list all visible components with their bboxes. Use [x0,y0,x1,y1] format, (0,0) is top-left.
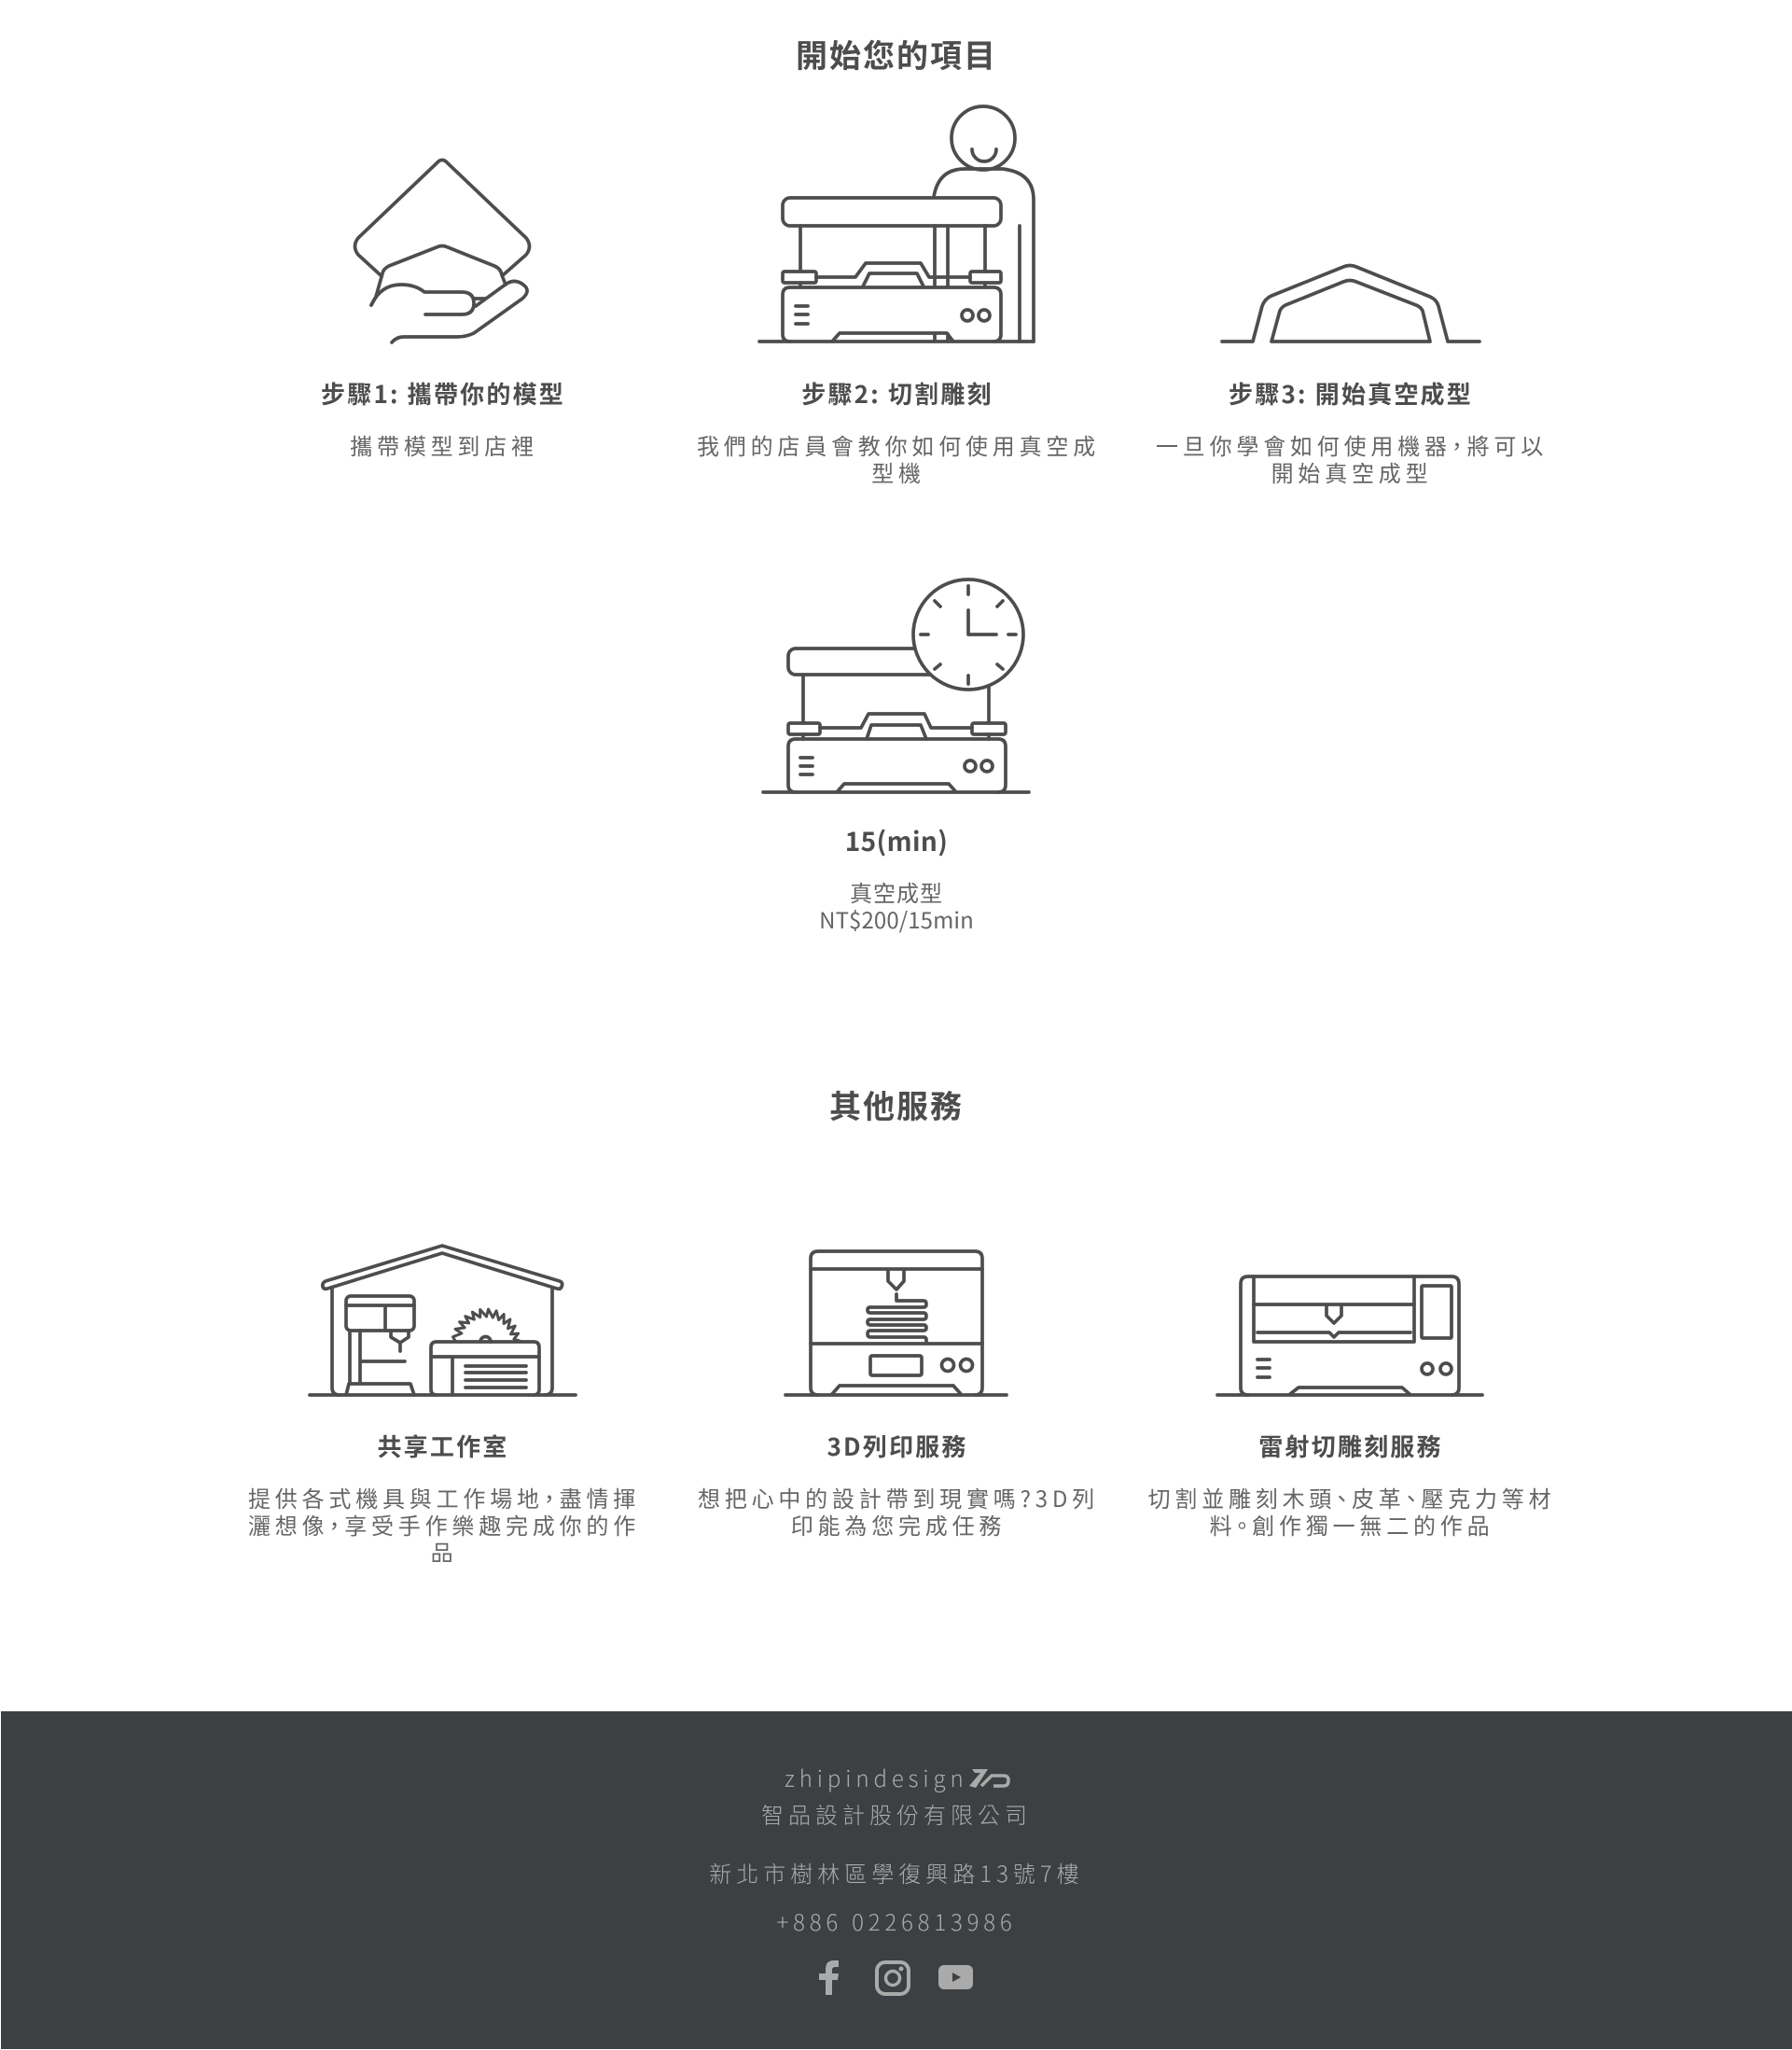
icon: 3D printer [784,1249,1008,1397]
icon: facebook [819,1960,839,1995]
icon: youtube [938,1965,973,1989]
icon: hand holding model [353,159,532,344]
title: start your project: 開始您的項目 [796,31,997,77]
duration heading: 15(min) [845,822,948,859]
address: 新北市樹林區學復興路13號7樓 [709,1856,1084,1889]
company name: 智品設計股份有限公司 [761,1797,1032,1830]
15 minute pricing text [819,822,974,935]
step 3 text [1156,376,1548,488]
step 1 heading: 步驟1: 攜帶你的模型 [321,376,565,411]
step 2 heading: 步驟2: 切割雕刻 [801,376,993,411]
icon: formed shell [1220,263,1481,343]
price description [819,875,974,935]
footer panel [1,1711,1792,2049]
step 3 description: 開始真空成型 [1271,455,1432,488]
3D printing heading: 3D列印服務 [827,1429,968,1463]
brand logo [969,1769,1010,1788]
step 3 description [1156,428,1548,488]
laser engraving description: 料。創作獨一無二的作品 [1210,1508,1493,1541]
step 1 text [321,376,565,461]
step 3 heading: 步驟3: 開始真空成型 [1229,376,1473,411]
step 3 description: 一旦你學會如何使用機器，將可以 [1156,428,1548,461]
3D printing description: 想把心中的設計帶到現實嗎?3D列 [698,1481,1099,1513]
icon: machine with clock [761,578,1031,794]
3D printing description [698,1481,1099,1541]
3D printing text [698,1429,1099,1541]
shared workshop heading: 共享工作室 [377,1429,509,1463]
laser engraving text [1148,1429,1555,1541]
step 2 text [697,376,1100,488]
shared workshop description: 提供各式機具與工作場地，盡情揮 [248,1481,640,1513]
icon: instagram [875,1960,910,1996]
brand name: zhipindesign [785,1761,968,1793]
step 1 description: 攜帶模型到店裡 [350,428,538,461]
heading: other services: 其他服務 [829,1081,964,1127]
price description: NT$200/15min [819,902,974,935]
icon: person using vacuum forming machine [757,105,1035,343]
laser engraving description: 切割並雕刻木頭、皮革、壓克力等材 [1148,1481,1555,1513]
shared workshop text [248,1429,640,1562]
step 2 description: 我們的店員會教你如何使用真空成 [697,428,1100,461]
step 2 description: 型機 [871,455,925,488]
phone: +886 0226813986 [776,1904,1017,1937]
step 2 description [697,428,1100,488]
laser engraving description [1148,1481,1555,1541]
shared workshop description [248,1481,640,1562]
laser engraving heading: 雷射切雕刻服務 [1258,1429,1443,1463]
3D printing description: 印能為您完成任務 [791,1508,1006,1541]
icon: shared workshop [308,1244,577,1397]
icon: laser cutter [1216,1275,1484,1397]
price description: 真空成型 [850,875,943,908]
shared workshop description: 灑想像，享受手作樂趣完成你的作 [248,1508,640,1541]
